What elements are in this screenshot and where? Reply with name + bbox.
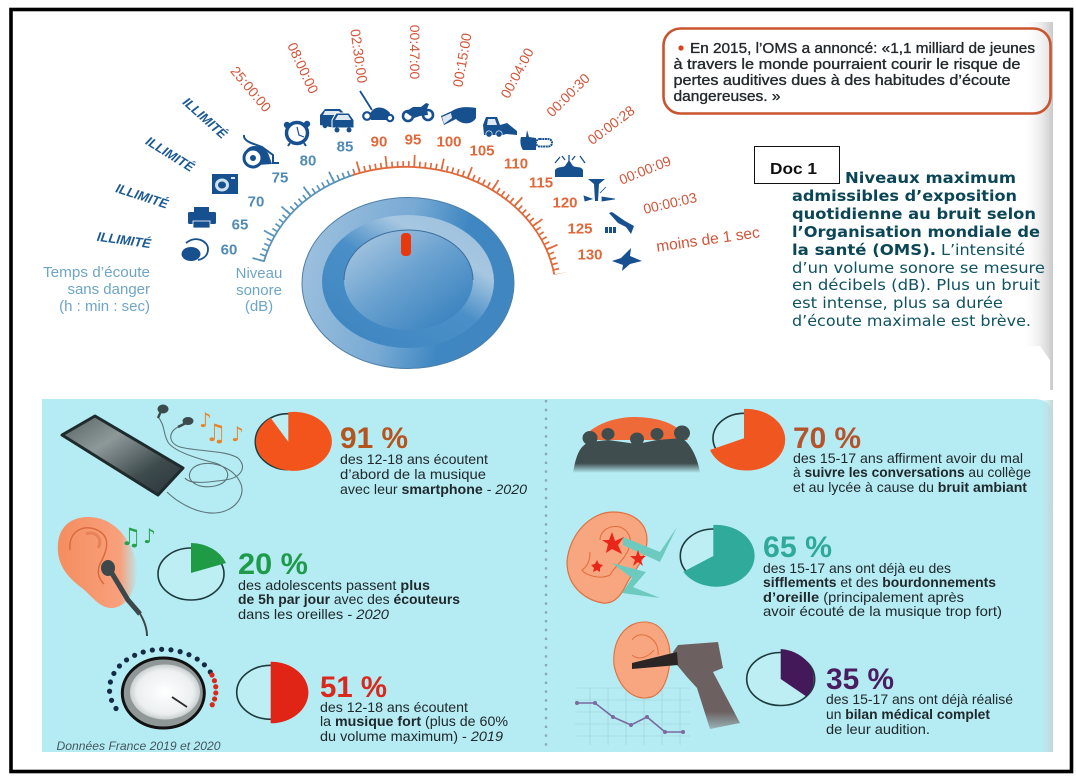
gauge scale ticks bbox=[258, 154, 565, 275]
legend: sound level: sonore bbox=[236, 282, 282, 299]
legend: sound level: (dB) bbox=[245, 298, 273, 315]
icon: concert 115 dB bbox=[555, 155, 585, 177]
callout: OMS 2015: dangereuses. » bbox=[674, 89, 780, 105]
legend: listening time: sans danger bbox=[67, 281, 150, 298]
icon: music notes green: ♫ bbox=[120, 523, 142, 551]
text block: document description: admissibles d’exposition bbox=[792, 187, 1017, 205]
icon: music notes orange: ♪ bbox=[231, 422, 244, 446]
knob pointer bbox=[401, 233, 411, 256]
icon: washing machine 70 dB bbox=[212, 174, 238, 194]
panel: statistics bbox=[42, 399, 1053, 752]
legend: listening time bbox=[43, 264, 150, 315]
pie: 91 percent bbox=[255, 412, 332, 471]
decibel levels: 60 bbox=[221, 242, 237, 258]
icon: telephone 60 dB bbox=[182, 239, 208, 261]
icon: lawn mower 90 dB bbox=[360, 91, 393, 121]
text block: document description bbox=[792, 169, 1045, 330]
icon: loader 105 dB bbox=[483, 117, 517, 137]
icon: fighter jet 130 dB bbox=[612, 248, 642, 271]
text block: document description: d’un volume sonore se mesure bbox=[792, 259, 1045, 277]
safe listening times: 00:00:09 bbox=[617, 152, 673, 188]
illustration: noisy crowd bbox=[573, 417, 700, 473]
callout: OMS 2015: pertes auditives dues à des habitudes d’écoute bbox=[674, 73, 1010, 89]
label: Doc 1 bbox=[754, 146, 840, 184]
text block: document description: L’intensité bbox=[941, 241, 1025, 259]
icon: vacuum cleaner 75 dB bbox=[244, 135, 279, 167]
lightning bolts bbox=[612, 527, 677, 598]
text block: document description: la santé (OMS). bbox=[792, 241, 936, 259]
pie: 65 percent bbox=[680, 525, 755, 587]
decibel levels: 125 bbox=[567, 220, 593, 238]
icon: music notes green: ♪ bbox=[143, 524, 156, 548]
pie: 20 percent bbox=[158, 543, 226, 600]
star bbox=[591, 560, 603, 572]
stat: 35 percent: des 15-17 ans ont déjà réalisé bbox=[826, 691, 1013, 707]
pie: 35 percent bbox=[747, 649, 815, 706]
icon: alarm clock 80 dB bbox=[284, 121, 310, 146]
decibel levels: 105 bbox=[469, 142, 495, 160]
decibel levels: 120 bbox=[552, 194, 578, 212]
icon: motorcycle 95 dB bbox=[403, 103, 433, 121]
safe listening times: ILLIMITÉ bbox=[180, 94, 230, 142]
safe listening times: 00:00:28 bbox=[584, 102, 638, 148]
stat: 91 percent: 91 % bbox=[340, 422, 408, 455]
stat: 70 percent: et au lycée à cause du bruit ambiant bbox=[793, 479, 1027, 495]
stat: 70 percent: 70 % bbox=[793, 422, 861, 455]
illustration: ear and otoscope bbox=[614, 622, 740, 729]
legend: sound level bbox=[236, 265, 282, 315]
stat: 20 percent: dans les oreilles - 2020 bbox=[238, 606, 389, 622]
stat: 51 percent: du volume maximum) - 2019 bbox=[320, 728, 503, 744]
stat: 91 percent: avec leur smartphone - 2020 bbox=[340, 481, 527, 497]
stat: 91 percent bbox=[340, 422, 527, 497]
decibel levels: 65 bbox=[232, 216, 248, 234]
page edge shadow bbox=[1022, 22, 1053, 390]
safe listening times: ILLIMITÉ bbox=[96, 229, 152, 251]
stat: 70 percent: des 15-17 ans affirment avoir du mal bbox=[793, 450, 1023, 466]
icon: cars 85 dB bbox=[320, 109, 354, 132]
stat: 35 percent: de leur audition. bbox=[826, 721, 930, 737]
text block: document description: Niveaux maximum bbox=[845, 169, 1016, 187]
decibel levels: 80 bbox=[300, 152, 316, 170]
icon: chainsaw 110 dB bbox=[520, 130, 552, 150]
decibel levels: 110 bbox=[504, 156, 528, 172]
icon: music notes orange: ♪ bbox=[199, 408, 212, 432]
icon: printer 65 dB bbox=[188, 207, 216, 228]
stat: 65 percent: des 15-17 ans ont déjà eu des bbox=[763, 560, 951, 576]
illustration: ear with tinnitus bbox=[567, 512, 677, 603]
callout: OMS 2015: En 2015, l’OMS a annoncé: «1,1 milliard de jeunes bbox=[690, 41, 1035, 57]
safe listening times: 00:00:30 bbox=[543, 70, 593, 120]
illustration: ear with earbud bbox=[58, 517, 147, 636]
icon: music notes orange: ♫ bbox=[205, 419, 227, 447]
volume knob bbox=[302, 198, 514, 368]
safe listening times: 08:00:00 bbox=[284, 40, 322, 96]
safe listening times: 00:15:00 bbox=[449, 32, 475, 88]
pie: 70 percent bbox=[710, 409, 785, 471]
legend: sound level: Niveau bbox=[236, 265, 282, 282]
decibel levels: 90 bbox=[371, 134, 387, 150]
label: Doc 1: Doc 1 bbox=[770, 161, 817, 178]
safe listening times: 02:30:00 bbox=[347, 28, 371, 84]
stat: 70 percent bbox=[793, 422, 1031, 495]
stat: 35 percent: 35 % bbox=[826, 663, 894, 696]
stat: 91 percent: d’abord de la musique bbox=[340, 466, 486, 482]
stat: 65 percent: 65 % bbox=[763, 531, 832, 564]
source note: Données France 2019 et 2020 bbox=[56, 739, 221, 753]
text block: document description: est intense, plus sa durée bbox=[792, 294, 1003, 312]
stat: 20 percent: de 5h par jour avec des écouteurs bbox=[238, 591, 460, 607]
stat: 51 percent: des 12-18 ans écoutent bbox=[320, 699, 468, 715]
safe listening times: 00:47:00 bbox=[407, 25, 423, 79]
stat: 20 percent bbox=[238, 548, 460, 622]
stat: 20 percent: des adolescents passent plus bbox=[238, 577, 430, 593]
decibel levels: 130 bbox=[577, 246, 603, 264]
stat: 65 percent bbox=[763, 531, 1002, 619]
stat: 91 percent: des 12-18 ans écoutent bbox=[340, 451, 488, 467]
stat: 35 percent: un bilan médical complet bbox=[826, 706, 990, 722]
illustration: medical chart bbox=[575, 688, 690, 745]
stat: 65 percent: sifflements et des bourdonnements bbox=[763, 574, 996, 590]
decibel levels: 70 bbox=[248, 194, 264, 210]
pie: 51 percent bbox=[237, 662, 308, 723]
stat: 65 percent: d’oreille (principalement après bbox=[763, 589, 964, 605]
stat: 51 percent: 51 % bbox=[320, 671, 387, 704]
safe listening times bbox=[96, 25, 761, 256]
stat: 70 percent: à suivre les conversations au collège bbox=[793, 464, 1031, 480]
icon: jackhammer 120 dB bbox=[584, 179, 615, 201]
stat: 35 percent bbox=[826, 663, 1013, 737]
safe listening times: ILLIMITÉ bbox=[143, 133, 197, 175]
decibel levels: 85 bbox=[337, 138, 353, 156]
decibel levels bbox=[221, 132, 603, 264]
icon: whistle 100 dB bbox=[441, 107, 476, 125]
decibel levels: 100 bbox=[436, 134, 462, 150]
star bbox=[630, 550, 646, 566]
safe listening times: 00:04:00 bbox=[497, 45, 537, 101]
star bbox=[602, 532, 624, 554]
text block: document description: d’écoute maximale est brève. bbox=[792, 312, 1031, 330]
callout: OMS 2015: à travers le monde pourraient courir le risque de bbox=[674, 57, 1020, 73]
stat: 20 percent: 20 % bbox=[238, 548, 308, 581]
safe listening times: moins de 1 sec bbox=[655, 224, 761, 256]
illustration: volume dial bbox=[110, 649, 216, 728]
decibel levels: 115 bbox=[529, 174, 553, 192]
safe listening times: 00:00:03 bbox=[642, 189, 699, 217]
callout: OMS 2015 bbox=[664, 28, 1050, 114]
decibel levels: 75 bbox=[272, 170, 288, 186]
stat: 51 percent bbox=[320, 671, 508, 744]
icon: shotgun 125 dB bbox=[605, 212, 634, 234]
decibel levels: 95 bbox=[405, 132, 421, 148]
stat: 51 percent: la musique fort (plus de 60% bbox=[320, 713, 508, 729]
text block: document description: quotidienne au bruit selon bbox=[792, 205, 1036, 223]
stat: 65 percent: avoir écouté de la musique trop fort) bbox=[763, 603, 1002, 619]
text block: document description: l’Organisation mondiale de bbox=[792, 223, 1040, 241]
text block: document description: en décibels (dB). Plus un bruit bbox=[792, 276, 1040, 294]
safe listening times: 25:00:00 bbox=[227, 63, 275, 115]
legend: listening time: Temps d’écoute bbox=[43, 264, 150, 281]
illustration: smartphone and earphones bbox=[62, 404, 242, 513]
legend: listening time: (h : min : sec) bbox=[59, 298, 150, 315]
safe listening times: ILLIMITÉ bbox=[114, 180, 170, 212]
